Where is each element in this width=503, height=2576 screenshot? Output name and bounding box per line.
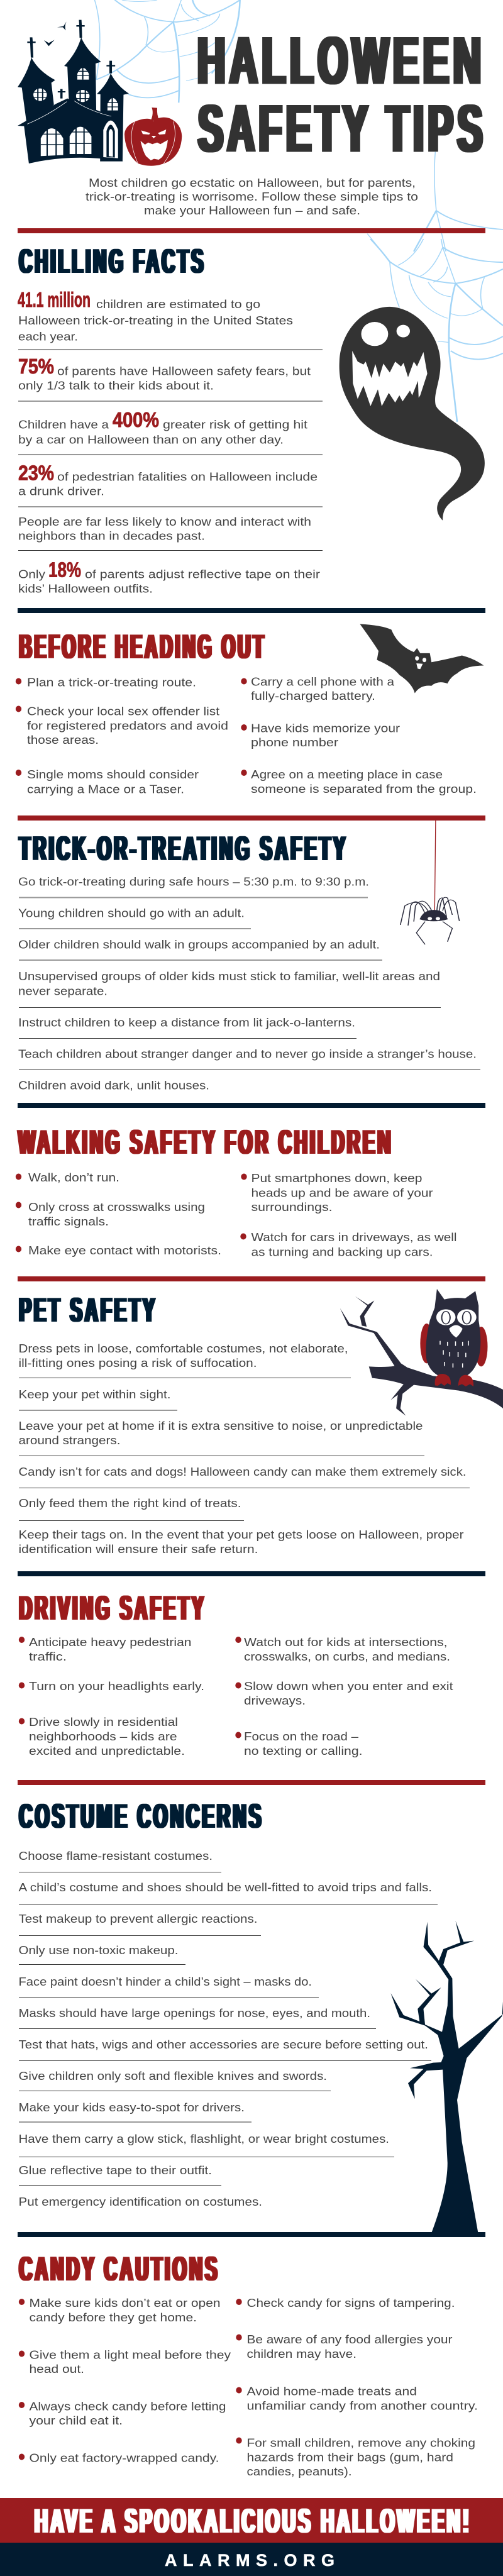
panel: chilling facts [18, 241, 485, 595]
bullet: food allergies: Be aware of any food allergies your [246, 2333, 453, 2346]
bullet: smartphones: Put smartphones down, keep [252, 1171, 423, 1185]
stat: 400%: Children have a [18, 417, 109, 431]
bullet: wait until home [19, 2296, 221, 2324]
bullet: memorize number: phone number [251, 736, 338, 749]
bullet: factory-wrapped: Only eat factory-wrapped candy. [29, 2451, 219, 2465]
bullet: meeting place [241, 768, 477, 795]
bullet: intersections [235, 1635, 450, 1663]
stat: 41.1 million [18, 288, 293, 343]
stat: 18%: of parents adjust reflective tape on their [85, 567, 320, 581]
bullet: single moms [16, 768, 199, 796]
bullet: wait until home: Make sure kids don’t eat or open [29, 2296, 220, 2309]
tip: well-fitted: A child’s costume and shoes should be well-fitted to avoid trips and falls. [19, 1881, 432, 1894]
bullet: sex offender list: for registered predators and avoid [27, 719, 228, 732]
tip: non-toxic: Only use non-toxic makeup. [19, 1943, 179, 1957]
bullet: food allergies: children may have. [246, 2347, 357, 2360]
tip: candy: Candy isn’t for cats and dogs! Halloween candy can make them extremely sick. [19, 1465, 467, 1478]
bullet: wait until home: candy before they get home. [29, 2311, 197, 2324]
bullet: meeting place: Agree on a meeting place in case [251, 768, 443, 781]
bullet: slow down [235, 1679, 453, 1707]
bullet: smartphones: heads up and be aware of your [252, 1186, 433, 1200]
tip: leave at home: around strangers. [19, 1434, 121, 1447]
bullet: anticipate traffic: traffic. [29, 1650, 67, 1663]
bullet: walk: Walk, don’t run. [28, 1171, 119, 1184]
bullet: choking hazards: hazards from their bags (gum, hard [246, 2451, 453, 2463]
heading: costume concerns: COSTUME CONCERNS [19, 1796, 264, 1835]
tip: soft knives: Give children only soft and flexible knives and swords. [19, 2069, 327, 2082]
stat: 23% [18, 462, 318, 498]
bullet: home-made treats: Avoid home-made treats and [246, 2384, 417, 2398]
tip: keep within sight: Keep your pet within sight. [19, 1388, 171, 1401]
tip: costumes: ill-fitting ones posing a risk of suffocation. [19, 1356, 257, 1369]
heading: driving safety: DRIVING SAFETY [19, 1588, 206, 1627]
tip: tags: identification will ensure their safe return. [19, 1542, 258, 1556]
bullet: crosswalks: traffic signals. [28, 1215, 109, 1228]
bullet: drive slowly: excited and unpredictable. [29, 1744, 185, 1757]
tip: right treats: Only feed them the right kind of treats. [19, 1496, 241, 1510]
bullet: slow down: Slow down when you enter and exit [244, 1679, 453, 1693]
tip: reflective tape: Glue reflective tape to their outfit. [19, 2164, 212, 2177]
bullet: sex offender list: those areas. [27, 733, 99, 746]
bullet: anticipate traffic [19, 1635, 192, 1663]
stat: 18%: Only [18, 567, 46, 581]
tip: costumes [19, 1342, 348, 1369]
stat: 400%: greater risk of getting hit [163, 417, 307, 431]
panel: walking safety for children [16, 1122, 457, 1259]
footer: alarms.org: ALARMS.ORG [165, 2551, 334, 2570]
tip: young children: Young children should go with an adult. [18, 907, 245, 919]
intro text: Most children go ecstatic on Halloween, but for parents, [89, 176, 416, 189]
section bar: navy [18, 1571, 485, 1576]
icon: bare tree [390, 1921, 503, 2232]
tip: unsupervised groups [18, 970, 440, 997]
stat: 75%: 75% [18, 355, 54, 378]
tip: mask openings: Masks should have large openings for nose, eyes, and mouth. [19, 2006, 370, 2020]
bullet: light meal: Give them a light meal before they [29, 2348, 231, 2362]
panel: pet safety [19, 1289, 503, 1556]
stat: 18% [18, 558, 320, 595]
tip: easy to spot: Make your kids easy-to-spot for drivers. [19, 2101, 245, 2114]
tip: emergency id: Put emergency identification on costumes. [19, 2195, 262, 2208]
stat: 75%: only 1/3 talk to their kids about it. [18, 379, 214, 392]
stat: 23%: of pedestrian fatalities on Halloween include [57, 470, 318, 483]
bullet: driveways: as turning and backing up cars. [252, 1245, 433, 1259]
icon: jack-o-lantern pumpkin [124, 108, 182, 166]
stat: 75% [18, 355, 311, 392]
bullet: driveways [240, 1230, 456, 1259]
bullet: slow down: driveways. [244, 1694, 306, 1707]
bullet: check candy: your child eat it. [29, 2414, 123, 2427]
bullet: drive slowly: neighborhoods – kids are [29, 1730, 177, 1743]
bullet: intersections: Watch out for kids at intersections, [244, 1635, 448, 1649]
footer: alarms.org [0, 2543, 503, 2576]
stat: 75%: of parents have Halloween safety fears, but [57, 365, 311, 377]
section bar: red [18, 228, 485, 233]
stat: 41.1 million: 41.1 million [18, 288, 91, 311]
bullet: choking hazards [236, 2436, 475, 2478]
title [197, 23, 487, 166]
bullet: light meal [19, 2348, 231, 2375]
bullet: sex offender list [16, 704, 228, 746]
bullet: food allergies [236, 2333, 453, 2360]
bullet: cell phone [241, 675, 395, 702]
section bar: red [18, 1276, 485, 1281]
tip: leave at home: Leave your pet at home if it is extra sensitive to noise, or unpredictable [19, 1419, 423, 1432]
stat: 400% [18, 408, 307, 446]
heading: before heading out: BEFORE HEADING OUT [19, 627, 267, 666]
stat: 400%: 400% [113, 408, 159, 431]
bullet: drive slowly: Drive slowly in residential [29, 1715, 178, 1728]
bullet: tampering: Check candy for signs of tampering. [246, 2296, 455, 2309]
bullet: headlights: Turn on your headlights early. [29, 1679, 204, 1693]
bullet: eye contact: Make eye contact with motorists. [28, 1244, 221, 1257]
bullet: light meal: head out. [29, 2362, 84, 2375]
intro text [86, 176, 418, 217]
section bar: red [18, 815, 485, 821]
tip: jack-o-lanterns: Instruct children to keep a distance from lit jack-o-lanterns. [18, 1016, 355, 1029]
icon: hanging spider [401, 821, 460, 944]
tip: test makeup: Test makeup to prevent allergic reactions. [19, 1912, 257, 1925]
stat: 41.1 million: each year. [18, 329, 78, 343]
section bar: navy [18, 1103, 485, 1108]
fact: neighbors: neighbors than in decades past. [18, 529, 205, 542]
intro text: make your Halloween fun – and safe. [144, 204, 360, 217]
tip: costumes: Dress pets in loose, comfortable costumes, not elaborate, [19, 1342, 348, 1355]
bullet: memorize number: Have kids memorize your [251, 722, 400, 734]
bullet: crosswalks: Only cross at crosswalks using [28, 1200, 205, 1213]
icon: ghost [340, 307, 485, 521]
panel: trick-or-treating safety [18, 821, 480, 1092]
tip: glow stick: Have them carry a glow stick, flashlight, or wear bright costumes. [19, 2132, 389, 2145]
tip: tags: Keep their tags on. In the event that your pet gets loose on Halloween, proper [19, 1528, 464, 1541]
bullet: anticipate traffic: Anticipate heavy pedestrian [29, 1635, 191, 1649]
bullet: plan route: Plan a trick-or-treating route. [27, 675, 196, 689]
bullet: smartphones: surroundings. [252, 1200, 332, 1213]
tip: tags [19, 1528, 464, 1556]
tip: unsupervised groups: Unsupervised groups of older kids must stick to familiar, well-lit areas and [18, 970, 440, 983]
heading: candy cautions: CANDY CAUTIONS [19, 2249, 220, 2288]
stat: 400%: by a car on Halloween than on any other day. [18, 433, 284, 446]
stat: 41.1 million: Halloween trick-or-treating in the United States [18, 314, 293, 327]
bullet: crosswalks [16, 1200, 205, 1228]
stat: 18%: 18% [48, 558, 81, 581]
heading: chilling facts: CHILLING FACTS [19, 241, 206, 280]
bullet: cell phone: Carry a cell phone with a [251, 675, 395, 688]
bullet: driveways: Watch for cars in driveways, as well [252, 1230, 456, 1244]
tip: safe hours: Go trick-or-treating during safe hours – 5:30 p.m. to 9:30 p.m. [18, 875, 369, 888]
icon: bat [360, 624, 484, 693]
bullet: home-made treats: unfamiliar candy from another country. [246, 2399, 478, 2412]
cobweb: top centre [95, 0, 240, 102]
panel: candy cautions [19, 2249, 478, 2478]
cobweb: right of header and facts [367, 152, 503, 422]
section bar: navy [18, 2232, 485, 2237]
bullet: cell phone: fully-charged battery. [251, 689, 375, 702]
bullet: sex offender list: Check your local sex offender list [27, 704, 219, 718]
fact: neighbors: People are far less likely to know and interact with [18, 515, 311, 528]
section bar: red [18, 1780, 485, 1785]
bullet: focus on road [235, 1730, 362, 1757]
panel: costume concerns [19, 1796, 503, 2232]
stat: 41.1 million: children are estimated to go [96, 297, 260, 311]
tip: leave at home [19, 1419, 423, 1447]
bullet: memorize number [241, 722, 400, 749]
bullet: check candy [19, 2399, 226, 2427]
panel: driving safety [19, 1588, 453, 1757]
bullet: drive slowly [19, 1715, 185, 1757]
panel: before heading out [16, 624, 484, 796]
bullet: single moms: carrying a Mace or a Taser. [27, 782, 184, 796]
tip: dark houses: Children avoid dark, unlit houses. [18, 1079, 209, 1092]
section bar: navy [18, 608, 485, 613]
fact: neighbors [18, 515, 311, 542]
intro text: trick-or-treating is worrisome. Follow these simple tips to [86, 190, 418, 203]
bullet: focus on road: no texting or calling. [244, 1744, 362, 1757]
tip: older children: Older children should walk in groups accompanied by an adult. [18, 938, 380, 951]
stat: 23%: 23% [18, 462, 54, 484]
stat: 18%: kids’ Halloween outfits. [18, 582, 153, 595]
bullet: check candy: Always check candy before letting [29, 2399, 226, 2413]
tip: stranger danger: Teach children about stranger danger and to never go inside a stranger’s house. [18, 1048, 477, 1060]
tip: face paint: Face paint doesn’t hinder a child’s sight – masks do. [19, 1975, 312, 1988]
icon: haunted house with bats [18, 20, 129, 163]
tip: flame-resistant: Choose flame-resistant costumes. [19, 1849, 213, 1862]
heading: pet safety: PET SAFETY [19, 1290, 157, 1329]
bullet: choking hazards: candies, peanuts). [246, 2465, 352, 2478]
bullet: intersections: crosswalks, on curbs, and medians. [244, 1650, 450, 1663]
bullet: meeting place: someone is separated from the group. [251, 782, 477, 795]
bullet: home-made treats [236, 2384, 478, 2412]
bullet: choking hazards: For small children, remove any choking [246, 2436, 475, 2450]
stat: 23%: a drunk driver. [18, 484, 104, 498]
icon: owl on branch [340, 1289, 503, 1416]
tip: accessories: Test that hats, wigs and other accessories are secure before setting out. [19, 2038, 428, 2051]
tip: unsupervised groups: never separate. [18, 985, 108, 997]
bullet: smartphones [241, 1171, 433, 1213]
bullet: single moms: Single moms should consider [27, 768, 199, 781]
bullet: focus on road: Focus on the road – [244, 1730, 359, 1743]
